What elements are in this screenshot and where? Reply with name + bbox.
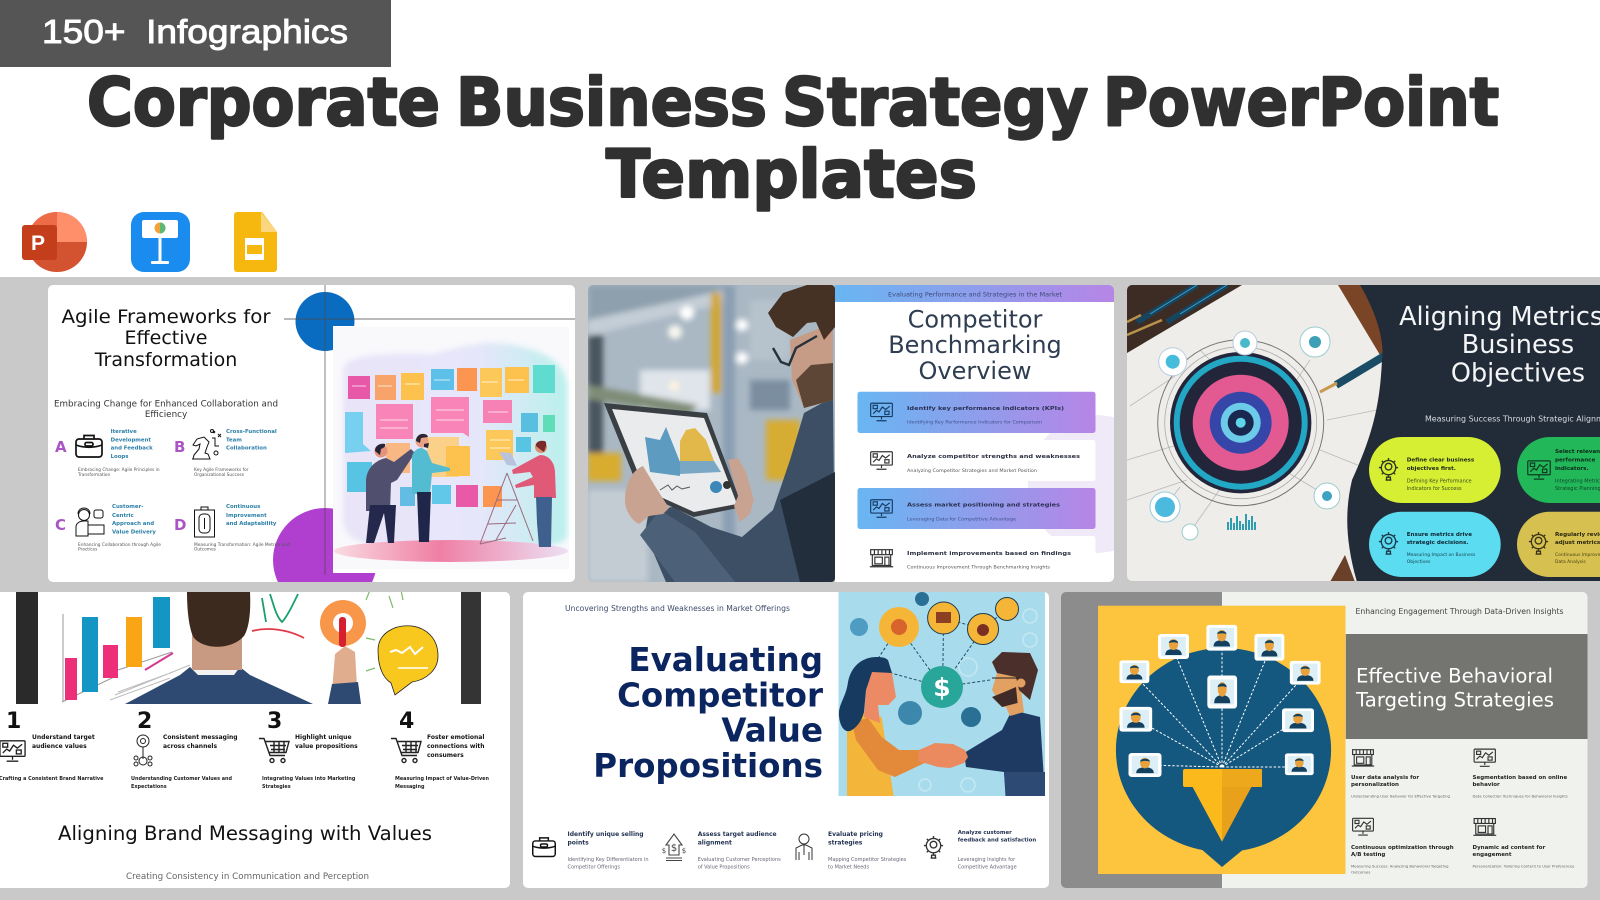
- pill: review metrics: [1517, 512, 1600, 577]
- item: target audience: $: [662, 847, 666, 855]
- item: target audience: Assess target audience: [698, 831, 777, 838]
- icon: PowerPoint: P: [31, 232, 45, 255]
- item B: B: [174, 438, 185, 456]
- illustration: handshake and value network: [838, 592, 1045, 796]
- item: dynamic ad: Personalization: Tailoring Content to User Preferences: [1472, 863, 1574, 868]
- man: head: [790, 323, 833, 408]
- item A: Loops: [111, 454, 129, 460]
- gallery background: [0, 277, 1600, 900]
- slide subtitle: Uncovering Strengths and Weaknesses in Market Offerings: [565, 604, 790, 613]
- step 3: [259, 709, 358, 790]
- icon: Google Slides: [234, 212, 277, 272]
- pill: select indicators: performance: [1555, 458, 1595, 464]
- step 4: 4: [399, 709, 414, 734]
- slide title: Objectives: [1451, 359, 1585, 389]
- slide title: Transformation: [94, 349, 237, 371]
- item: segmentation: Segmentation based on online: [1472, 775, 1567, 781]
- slide title: [593, 641, 823, 785]
- man: [964, 652, 1045, 796]
- person: left: [366, 444, 415, 543]
- pill: select indicators: [1517, 437, 1600, 503]
- item C: Enhancing Collaboration through Agile: [78, 542, 161, 548]
- pill: drive decisions: Objectives: [1407, 559, 1431, 565]
- item: user data analysis: User data analysis for: [1351, 775, 1419, 781]
- decorative circle: blue: [296, 292, 354, 351]
- slide title: Agile Frameworks for: [62, 306, 271, 328]
- item: user data analysis: Understanding User Behavior for Effective Targeting: [1351, 793, 1451, 798]
- pill: drive decisions: [1369, 512, 1501, 577]
- item: unique selling points: Competitor Offerings: [568, 865, 620, 871]
- item A: Development: [111, 438, 151, 444]
- slide title: [890, 309, 1060, 380]
- cross lines: [284, 285, 575, 575]
- item C: Approach and: [112, 521, 154, 527]
- title band: Effective Behavioral: [1356, 665, 1553, 688]
- row 3: Leveraging Data for Competitive Advantage: [907, 517, 1016, 523]
- item: customer feedback: Leveraging Insights for: [958, 857, 1016, 863]
- item B: [174, 429, 277, 478]
- item: customer feedback: Competitive Advantage: [958, 865, 1017, 871]
- item: optimization: Continuous optimization through: [1351, 845, 1454, 851]
- slide title: Competitor: [617, 677, 823, 715]
- step 1: audience values: [32, 743, 87, 750]
- item A: [55, 429, 160, 478]
- row 4: Continuous Improvement Through Benchmarking Insights: [907, 565, 1051, 571]
- item: unique selling points: Identify unique selling: [568, 831, 644, 838]
- step 4: [391, 709, 489, 790]
- pill: review metrics: Data Analysis: [1555, 559, 1586, 565]
- pill: define objectives: objectives first.: [1407, 466, 1456, 472]
- slide subtitle: Efficiency: [145, 410, 187, 420]
- item B: Team: [226, 438, 242, 444]
- item: optimization: Outcomes: [1351, 869, 1370, 874]
- item: target audience: $: [671, 843, 677, 854]
- item: target audience: of Value Propositions: [698, 865, 750, 871]
- slide title: Value: [721, 712, 823, 750]
- panel: Agile Frameworks slide: [48, 285, 575, 612]
- row 4: [870, 536, 1096, 570]
- item A: Transformation: [77, 472, 111, 478]
- slide title: Business: [1462, 330, 1574, 360]
- item D: Improvement: [226, 513, 267, 519]
- pill: drive decisions: Measuring Impact on Business: [1407, 552, 1476, 558]
- step 2: Consistent messaging: [163, 734, 238, 741]
- item: target audience: Evaluating Customer Perceptions: [698, 857, 781, 863]
- step 3: value propositions: [295, 743, 358, 750]
- item D: Continuous: [226, 504, 260, 510]
- row 1: [858, 392, 1096, 433]
- item B: Cross-Functional: [226, 429, 277, 435]
- icon: Keynote: [131, 212, 190, 272]
- item C: Centric: [112, 513, 134, 519]
- pill: drive decisions: strategic decisions.: [1407, 540, 1468, 546]
- slide title: Benchmarking: [888, 331, 1062, 359]
- row 2: Analyzing Competitor Strategies and Market Position: [907, 468, 1037, 474]
- item: customer feedback: Analyze customer: [958, 830, 1012, 836]
- panel: Behavioral Targeting slide: [1061, 592, 1588, 888]
- step 4: Foster emotional: [427, 734, 484, 741]
- slide title: Effective: [125, 327, 207, 349]
- item B: Collaboration: [226, 446, 267, 452]
- item B: Organizational Success: [194, 472, 245, 478]
- item: customer feedback: feedback and satisfaction: [958, 838, 1036, 844]
- title band: Targeting Strategies: [1355, 689, 1554, 712]
- handshake: [918, 743, 968, 768]
- slide title: Evaluating: [628, 641, 823, 679]
- illustration: team at sticky note wall: [333, 326, 575, 573]
- step 2: 2: [137, 709, 152, 734]
- pill: define objectives: [1369, 437, 1501, 503]
- panel: Aligning Brand Messaging slide: [0, 590, 510, 888]
- item: unique selling points: Identifying Key Differentiators in: [568, 857, 649, 863]
- slide subtitle: Creating Consistency in Communication and Perception: [126, 872, 369, 882]
- pill: define objectives: Indicators for Success: [1407, 486, 1462, 492]
- title: Strategy: [782, 64, 1088, 141]
- pill: select indicators: indicators.: [1555, 466, 1589, 472]
- man: jacket: [645, 397, 835, 582]
- pill: drive decisions: Ensure metrics drive: [1407, 532, 1472, 538]
- row 1: Identify key performance indicators (KPIs): [907, 406, 1064, 412]
- tablet: [604, 403, 742, 517]
- pill: review metrics: adjust metrics: [1555, 540, 1600, 546]
- title: Templates: [606, 136, 977, 213]
- photo: presenter at whiteboard: [16, 590, 481, 704]
- item C: C: [55, 516, 66, 534]
- item D: Measuring Transformation: Agile Metrics and: [194, 542, 290, 548]
- step 4: connections with: [427, 743, 485, 750]
- row 2: [858, 440, 1096, 481]
- item: pricing: strategies: [828, 840, 863, 847]
- slide subtitle: Enhancing Engagement Through Data-Driven Insights: [1356, 607, 1564, 616]
- row 4: Implement improvements based on findings: [907, 551, 1072, 557]
- row 1: Identifying Key Performance Indicators for Comparison: [907, 420, 1042, 426]
- step 3: Highlight unique: [295, 734, 352, 741]
- slide title: [1399, 302, 1600, 389]
- step 4: consumers: [427, 752, 464, 759]
- item: pricing: [796, 831, 907, 871]
- person: right with easel: [480, 441, 556, 547]
- panel: Aligning Metrics slide: [1127, 285, 1600, 582]
- item: pricing: Mapping Competitor Strategies: [828, 857, 907, 863]
- dark curved background: [1347, 285, 1600, 582]
- item D: D: [174, 516, 186, 534]
- item C: Customer-: [112, 504, 143, 510]
- item: target audience: alignment: [698, 840, 732, 847]
- item: optimization: [1351, 818, 1454, 874]
- row 2: Analyze competitor strengths and weaknesses: [907, 454, 1081, 460]
- slide title: [62, 309, 270, 366]
- photo: man with tablet in factory: [588, 285, 835, 582]
- slide title: Overview: [918, 357, 1032, 385]
- item C: [55, 504, 161, 552]
- item A: Embracing Change: Agile Principles in: [78, 467, 160, 473]
- step 3: Strategies: [262, 784, 291, 790]
- illustration: handshake and value network: $: [933, 673, 951, 702]
- item: segmentation: [1472, 749, 1568, 798]
- item: customer feedback: [924, 830, 1036, 871]
- icon: PowerPoint: [22, 212, 87, 272]
- title: Business: [456, 64, 767, 141]
- item: user data analysis: [1351, 750, 1451, 798]
- top band: Evaluating Performance and Strategies in the Market: [888, 292, 1063, 299]
- item B: Key Agile Frameworks for: [194, 467, 249, 473]
- item: target audience: $: [682, 847, 686, 855]
- badge: 150+ Infographics: 150+ Infographics: [42, 13, 348, 50]
- item C: Value Delivery: [112, 530, 156, 536]
- step 2: Understanding Customer Values and: [131, 776, 232, 782]
- slide title: Competitor: [908, 306, 1043, 334]
- item: dynamic ad: Dynamic ad content for: [1472, 845, 1546, 851]
- step 3: 3: [267, 709, 282, 734]
- slide subtitle: [54, 400, 278, 420]
- woman: [839, 657, 925, 796]
- item: dynamic ad: [1472, 819, 1574, 868]
- pill: define objectives: Defining Key Performance: [1407, 479, 1472, 485]
- step 3: Integrating Values into Marketing: [262, 776, 356, 782]
- panel: Competitor Benchmarking slide: [588, 285, 1164, 582]
- title: [87, 64, 1499, 213]
- title band: [1346, 634, 1588, 739]
- item: optimization: Measuring Success: Analyzing Behavioral Targeting: [1351, 863, 1449, 868]
- illustration: audience funnel: [1098, 606, 1346, 874]
- lavender backdrop circle: [1028, 415, 1114, 553]
- step 2: [131, 709, 238, 790]
- item: target audience: [662, 831, 781, 871]
- title: PowerPoint: [1103, 64, 1499, 141]
- item: pricing: to Market Needs: [828, 865, 869, 871]
- item: segmentation: Data Collection Techniques for Behavioral Insights: [1472, 793, 1568, 798]
- hands: [625, 466, 669, 524]
- item: unique selling points: points: [568, 840, 589, 847]
- slide title: Aligning Brand Messaging with Values: [58, 822, 432, 845]
- item: user data analysis: personalization: [1351, 782, 1399, 788]
- row 3: Assess market positioning and strategies: [907, 503, 1061, 509]
- photo: target on paper: [1127, 285, 1388, 582]
- item: unique selling points: [533, 831, 649, 871]
- step 2: across channels: [163, 743, 217, 750]
- panel: Competitor Value Propositions slide: [523, 592, 1049, 888]
- step 1: 1: [6, 709, 21, 734]
- item D: and Adaptability: [226, 521, 277, 527]
- item: pricing: Evaluate pricing: [828, 831, 883, 838]
- decorative circle: purple: [273, 508, 376, 582]
- item A: and Feedback: [111, 446, 153, 452]
- top band: [835, 285, 1114, 302]
- item C: Practices: [78, 546, 98, 552]
- item: dynamic ad: engagement: [1472, 852, 1512, 858]
- step 1: Understand target: [32, 734, 95, 741]
- row 3: [858, 488, 1096, 529]
- pill: define objectives: Define clear business: [1407, 458, 1475, 464]
- person: centre: [412, 434, 450, 542]
- step 4: Measuring Impact of Value-Driven: [395, 776, 489, 782]
- item A: Iterative: [111, 429, 137, 435]
- title: Corporate: [87, 64, 440, 141]
- pill: select indicators: Strategic Planning: [1555, 486, 1600, 492]
- item: segmentation: behavior: [1472, 782, 1500, 788]
- item D: Outcomes: [194, 546, 217, 552]
- item A: A: [55, 438, 67, 456]
- step 4: Messaging: [395, 784, 425, 790]
- slide subtitle: Embracing Change for Enhanced Collaboration and: [54, 400, 278, 410]
- badge: 150+ Infographics: [0, 0, 391, 67]
- item: optimization: A/B testing: [1351, 852, 1385, 858]
- slide title: Propositions: [593, 747, 823, 785]
- step 1: Crafting a Consistent Brand Narrative: [0, 776, 104, 782]
- step 1: [0, 709, 104, 782]
- item D: [174, 504, 290, 552]
- step 2: Expectations: [131, 784, 167, 790]
